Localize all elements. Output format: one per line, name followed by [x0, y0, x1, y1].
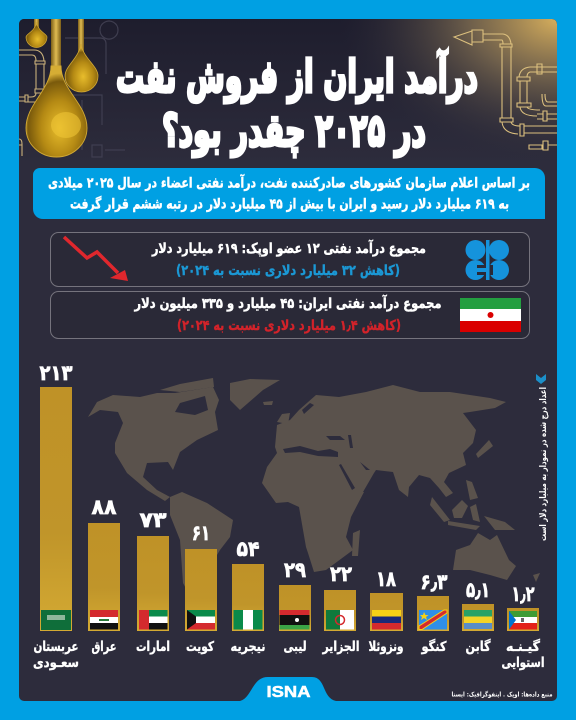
intro callout: به ۶۱۹ میلیارد دلار رسید و ایران با بیش از ۴۵ میلیارد دلار در رتبه ششم قرار گرفت	[70, 196, 509, 212]
note: chart unit: اعداد درج شده در نمودار به میلیارد دلار است	[539, 387, 549, 541]
left pipes	[19, 50, 46, 156]
bar: Nigeria: نیجریه	[230, 639, 266, 655]
bar: Equatorial Guinea: گیـنـه	[506, 638, 540, 655]
bar: Equatorial Guinea: استوایی	[502, 655, 544, 671]
ISNA tab: ISNA	[266, 684, 311, 701]
bar: Kuwait	[185, 521, 217, 655]
panel: Iran revenue	[50, 292, 530, 338]
bar: Iraq: عراق	[92, 639, 116, 655]
panel: OPEC revenue: (کاهش ۳۲ میلیارد دلاری نسبت به ۲۰۲۴)	[176, 263, 400, 279]
bar: Libya: ۲۹	[284, 558, 306, 582]
bar: UAE: امارات	[136, 639, 170, 655]
bar: Saudi Arabia: سعـودی	[33, 655, 79, 671]
bar: Iraq: ۸۸	[92, 495, 117, 519]
bar: Kuwait: کویت	[186, 639, 214, 655]
title: در ۲۰۲۵ چقدر بود؟	[162, 104, 426, 157]
bar: Nigeria	[230, 537, 266, 655]
ISNA tab	[240, 677, 336, 701]
icon: blue chevrons	[536, 374, 546, 384]
bar: Libya: لیبی	[284, 639, 306, 655]
world map background	[88, 378, 540, 600]
icon: Iran flag	[460, 298, 521, 332]
panel: OPEC revenue	[50, 232, 530, 286]
bar chart	[33, 361, 544, 671]
bar: Congo	[417, 570, 449, 655]
bar: Equatorial Guinea	[502, 582, 544, 671]
header artwork: glow, drops and pipes	[19, 19, 557, 164]
panel: Iran revenue: (کاهش ۱٫۴ میلیارد دلاری نسبت به ۲۰۲۴)	[177, 318, 401, 334]
source note: منبع داده‌ها: اوپک . اینفوگرافیک: ایسنا	[452, 690, 552, 698]
bar: Congo: ۶٫۳	[420, 570, 448, 594]
bar: Gabon: گابن	[466, 638, 491, 655]
bar: UAE	[136, 508, 170, 655]
bar: Equatorial Guinea: ۱٫۲	[512, 582, 535, 606]
note: chart unit	[536, 374, 549, 541]
bar: Kuwait: ۶۱	[192, 521, 210, 545]
panel: Iran revenue: مجموع درآمد نفتی ایران: ۴۵ میلیارد و ۳۳۵ میلیون دلار	[134, 294, 441, 312]
bar: Congo: کنگو	[421, 638, 447, 655]
bar: Saudi Arabia: ۲۱۳	[40, 361, 73, 385]
icon: medium oil drop	[65, 19, 98, 92]
bar: Venezuela: ۱۸	[376, 567, 396, 591]
icon: large oil drop	[26, 19, 87, 157]
title	[116, 49, 478, 157]
bar: Nigeria: ۵۴	[236, 537, 260, 561]
intro callout	[33, 168, 545, 219]
bar: Gabon: ۵٫۱	[466, 578, 490, 602]
right pipes	[454, 30, 557, 150]
bar: Saudi Arabia: عربستان	[34, 639, 78, 655]
bar: Algeria: ۲۲	[330, 562, 352, 586]
bar: Venezuela	[368, 567, 404, 655]
icon: small oil drop	[26, 19, 47, 48]
panel: OPEC revenue: مجموع درآمد نفتی ۱۲ عضو اوپک: ۶۱۹ میلیارد دلار	[151, 239, 426, 257]
bar: Iraq	[88, 495, 120, 655]
bar: Venezuela: ونزوئلا	[368, 639, 404, 655]
icon: OPEC logo	[466, 240, 509, 280]
bar: Algeria: الجزایر	[322, 639, 360, 655]
bar: Saudi Arabia	[33, 361, 79, 671]
bar: Algeria	[322, 562, 360, 655]
bar: Libya	[279, 558, 311, 655]
bar: Gabon	[462, 578, 494, 655]
icon: red down arrow	[64, 237, 128, 281]
bar: UAE: ۷۳	[140, 508, 167, 532]
